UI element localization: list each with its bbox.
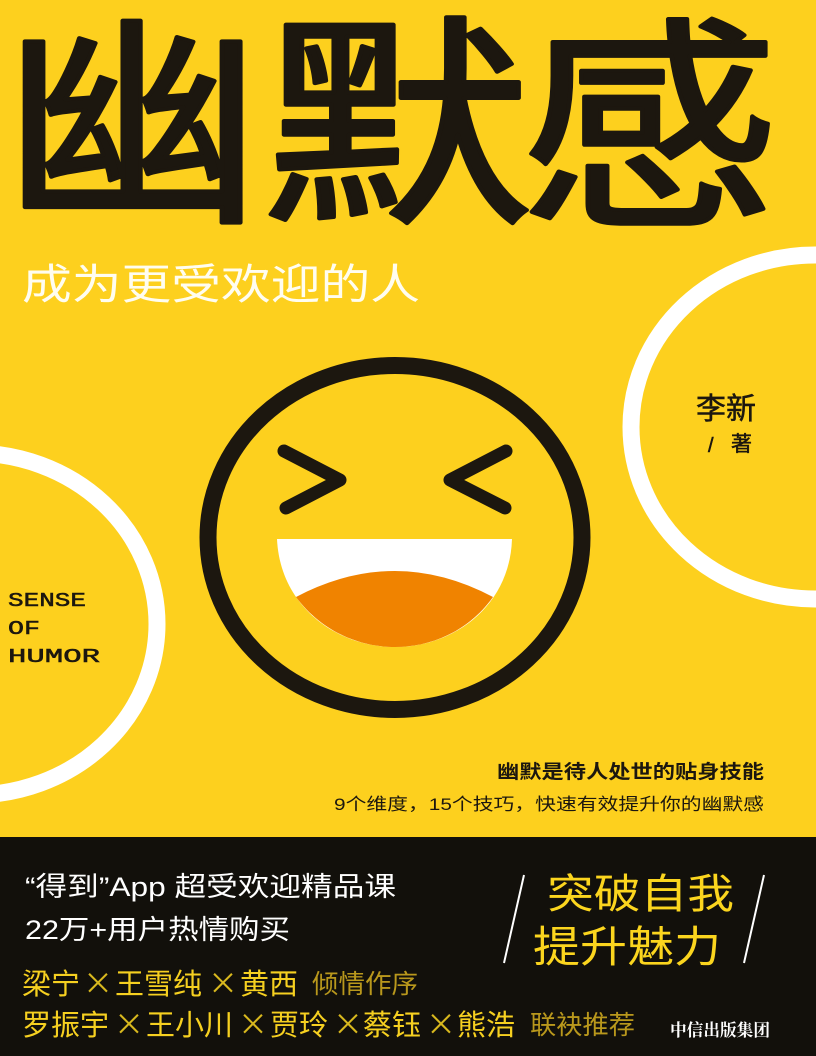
ring: right white circle	[631, 255, 816, 599]
course promo	[25, 872, 396, 945]
endorsers recommendation: 联袂推荐	[530, 1010, 635, 1040]
tagline	[334, 761, 764, 814]
author: 著	[731, 433, 752, 456]
title	[3, 2, 779, 256]
endorsers preface: 王雪纯	[115, 968, 202, 1001]
endorsers recommendation: 贾玲	[270, 1009, 328, 1042]
face outline	[208, 366, 582, 710]
tagline: 幽默是待人处世的贴身技能	[497, 761, 764, 783]
publisher: 中信出版集团	[670, 1016, 770, 1041]
title: 默	[262, 2, 532, 254]
slogan: 突破自我	[547, 871, 734, 917]
endorsers recommendation: ×	[238, 1000, 268, 1044]
mouth teeth	[277, 539, 512, 647]
smiley face	[208, 366, 582, 710]
endorsers preface: 黄西	[240, 968, 298, 1001]
english title	[8, 590, 100, 668]
endorsers preface: ×	[83, 959, 113, 1003]
title: 感	[520, 6, 779, 256]
endorsers recommendation	[22, 1000, 635, 1044]
author	[696, 393, 756, 457]
english title: SENSE	[8, 590, 86, 612]
title: 幽	[3, 4, 262, 254]
tagline: 9个维度，15个技巧，快速有效提升你的幽默感	[334, 795, 764, 814]
left eye	[284, 451, 340, 508]
slogan	[533, 871, 734, 972]
endorsers recommendation: ×	[114, 1000, 144, 1044]
endorsers recommendation: ×	[333, 1000, 363, 1044]
right eye	[450, 451, 506, 508]
course promo: 22万+用户热情购买	[25, 915, 290, 945]
english title: HUMOR	[8, 646, 100, 668]
slogan: 提升魅力	[533, 924, 721, 972]
black footer band	[0, 837, 816, 1056]
mouth tongue	[296, 571, 493, 647]
endorsers recommendation: 罗振宇	[22, 1009, 109, 1042]
endorsers recommendation: 王小川	[146, 1010, 233, 1042]
author: /	[708, 435, 714, 457]
endorsers recommendation: ×	[426, 1000, 456, 1044]
slogan slashes	[504, 875, 764, 963]
english title: OF	[8, 618, 40, 640]
endorsers preface	[22, 959, 418, 1003]
course promo: “得到”App 超受欢迎精品课	[25, 872, 396, 902]
endorsers preface: ×	[208, 959, 238, 1003]
author: 李新	[696, 393, 756, 426]
endorsers preface: 梁宁	[22, 968, 80, 1001]
ring: left white circle	[0, 453, 157, 795]
endorsers recommendation: 熊浩	[457, 1009, 515, 1042]
subtitle: 成为更受欢迎的人	[22, 261, 420, 308]
endorsers preface: 倾情作序	[312, 969, 418, 999]
endorsers recommendation: 蔡钰	[363, 1009, 421, 1042]
